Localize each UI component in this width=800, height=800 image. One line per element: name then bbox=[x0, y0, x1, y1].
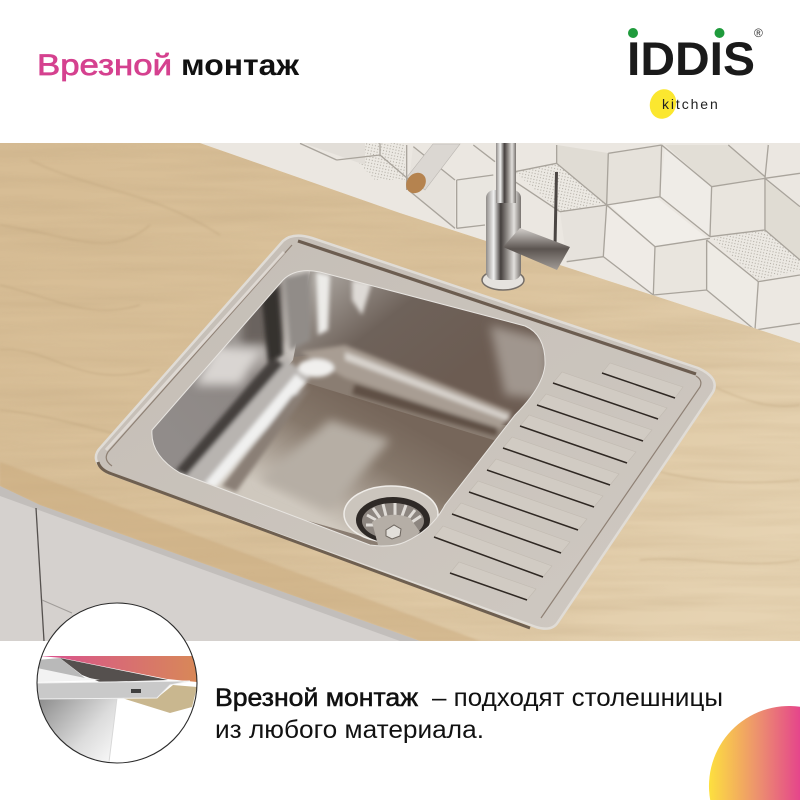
steel rim bbox=[37, 681, 190, 699]
sink bbox=[96, 236, 715, 629]
description text: из любого материала. bbox=[215, 716, 484, 744]
logo: IDDIS kitchen bbox=[627, 26, 763, 123]
logo: IDDIS kitchen: kitchen bbox=[662, 96, 720, 112]
wooden worktop bbox=[0, 143, 800, 641]
description text: – подходят столешницы bbox=[432, 684, 723, 712]
groove bbox=[60, 658, 168, 682]
title: Врезной bbox=[37, 49, 172, 82]
sink wall bbox=[37, 698, 117, 762]
title: монтаж bbox=[181, 49, 300, 82]
decorative gradient circle bbox=[709, 706, 800, 800]
basin bbox=[152, 271, 544, 546]
chipboard bbox=[122, 685, 197, 713]
detail lens: cross-section of the mount bbox=[37, 603, 197, 763]
tiled backsplash bbox=[200, 143, 800, 343]
sharp reflections bbox=[176, 272, 512, 492]
product photo: sink in worktop bbox=[0, 143, 800, 641]
cabinet fronts bbox=[0, 440, 800, 641]
worktop front edge band bbox=[0, 462, 480, 641]
description text bbox=[215, 684, 723, 744]
logo: IDDIS kitchen: ® bbox=[754, 26, 763, 40]
drain bbox=[344, 486, 438, 548]
faucet spout end bbox=[402, 144, 460, 197]
logo: IDDIS kitchen: IDDIS bbox=[627, 32, 755, 85]
worktop surface bbox=[40, 656, 197, 682]
drainboard ridges bbox=[434, 363, 683, 600]
rim groove bbox=[106, 245, 701, 618]
description text: Врезной монтаж bbox=[215, 684, 418, 712]
faucet bbox=[402, 143, 570, 290]
title bbox=[37, 49, 300, 82]
sink rim bbox=[96, 236, 715, 629]
soft reflections bbox=[195, 275, 548, 510]
